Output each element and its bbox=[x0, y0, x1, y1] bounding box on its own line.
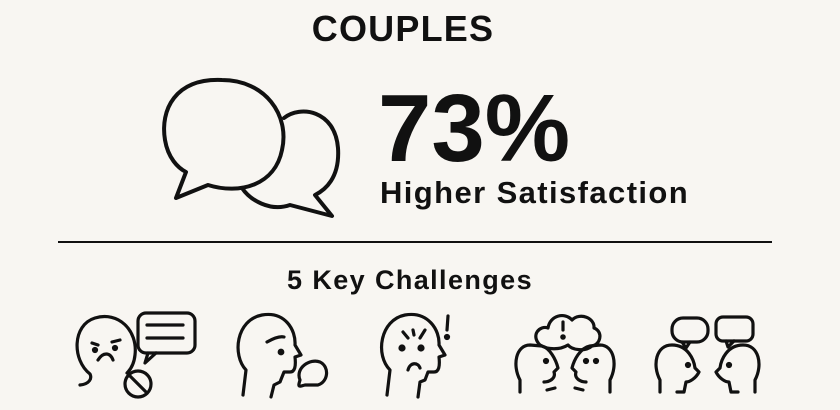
stat label: Higher Satisfaction bbox=[380, 175, 689, 210]
icon 1: sad face with blocked speech bbox=[77, 313, 195, 397]
divider bbox=[58, 241, 772, 243]
icon 3: frustrated head bbox=[382, 314, 448, 397]
icon 5: two heads with speech bubbles bbox=[656, 317, 759, 392]
title: COUPLES bbox=[312, 8, 494, 49]
icon 4: two heads with thought cloud bbox=[516, 316, 614, 392]
icon 2: head with small bubble bbox=[238, 314, 327, 397]
icons: challenges bbox=[77, 313, 759, 397]
section heading: 5 Key Challenges bbox=[287, 265, 533, 295]
big stat: 73% bbox=[378, 75, 570, 182]
